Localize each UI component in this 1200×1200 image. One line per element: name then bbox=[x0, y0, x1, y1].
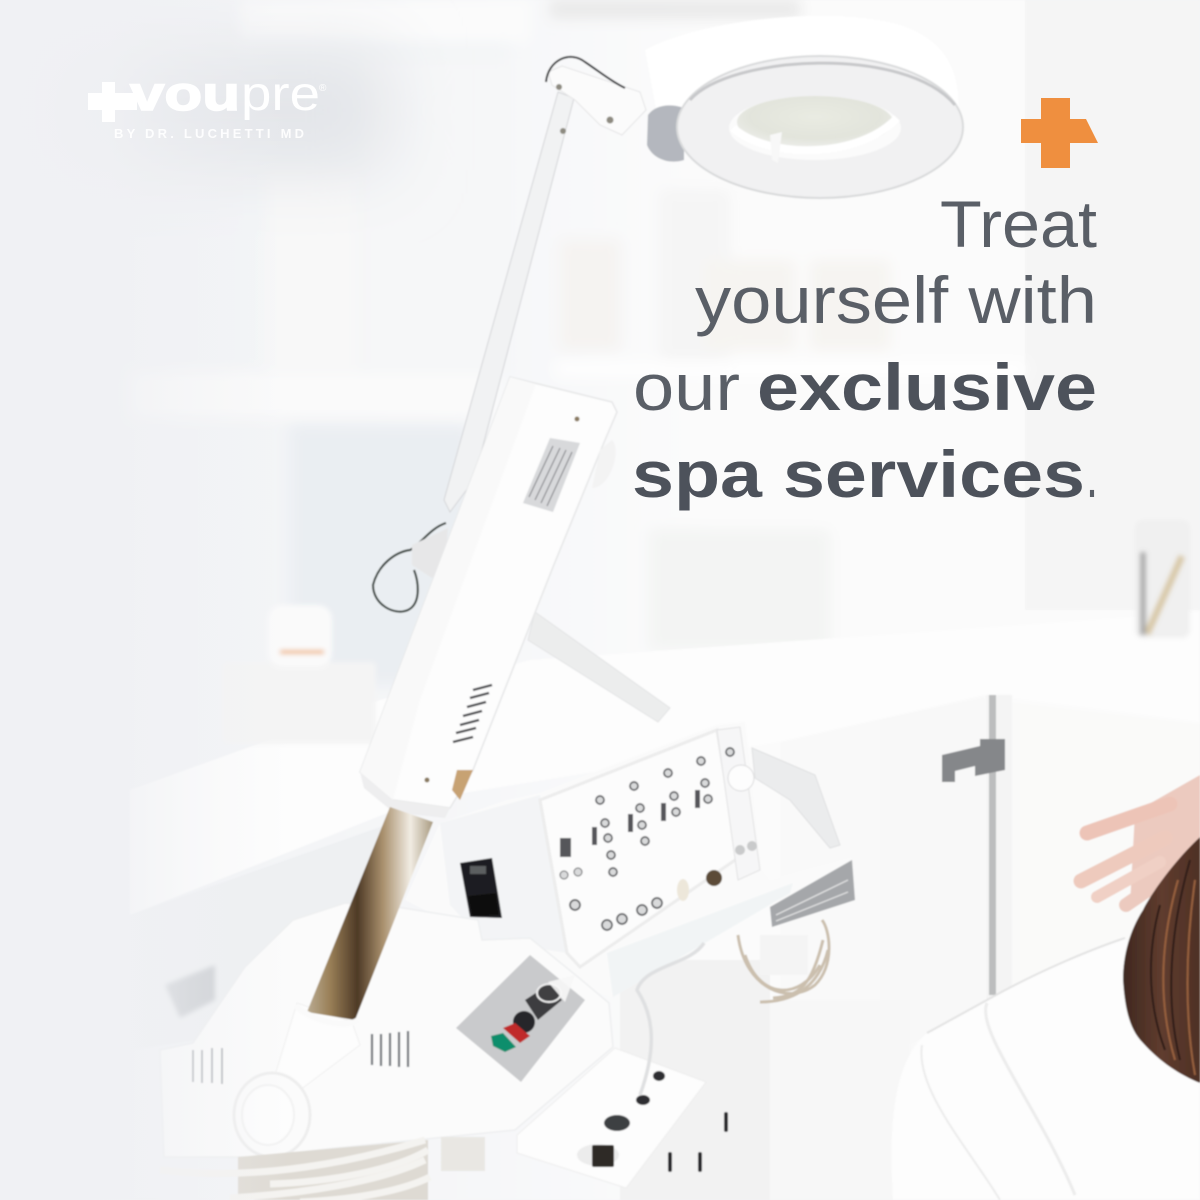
headline: . bbox=[1086, 437, 1098, 511]
headline: our bbox=[633, 350, 740, 424]
lamp cable bbox=[373, 523, 446, 612]
lamp shade bbox=[645, 16, 959, 130]
vents bbox=[372, 1031, 408, 1067]
lens ring bbox=[677, 56, 963, 198]
gold tape bbox=[452, 770, 473, 800]
cable bundle bbox=[238, 1140, 428, 1200]
client hair bbox=[1123, 837, 1200, 1083]
lower cabinets bbox=[780, 695, 985, 1200]
tray bbox=[607, 883, 793, 997]
power socket bbox=[460, 858, 502, 918]
wordmark bbox=[130, 68, 327, 121]
wall panel: right bbox=[1025, 0, 1200, 610]
wordmark: pre bbox=[241, 68, 320, 121]
vent slots bbox=[453, 685, 492, 742]
counter top bbox=[130, 612, 1200, 915]
display bbox=[560, 838, 571, 857]
magnifier lamp bbox=[444, 16, 963, 512]
rotary knob bbox=[525, 985, 562, 1020]
cabinet hinge bbox=[942, 739, 1005, 782]
coiled cable bbox=[738, 920, 829, 1002]
tagline: BY DR. LUCHETTI MD bbox=[114, 126, 304, 141]
headline: exclusive bbox=[757, 350, 1097, 424]
icon: orange cross bbox=[1021, 98, 1098, 168]
wordmark: ® bbox=[319, 83, 327, 94]
chrome pole bbox=[296, 807, 433, 1024]
headline: spa services bbox=[632, 437, 1085, 511]
hand bbox=[1081, 775, 1200, 905]
red button bbox=[503, 1023, 530, 1043]
label sticker bbox=[523, 438, 580, 512]
jar on counter bbox=[222, 605, 376, 744]
shelving: cabinet and shelves bbox=[130, 0, 1026, 685]
headline: yourself with bbox=[695, 263, 1097, 337]
side panel bbox=[717, 727, 760, 880]
knobs bbox=[560, 748, 734, 930]
wordmark: vou bbox=[130, 68, 240, 121]
lamp collar bbox=[647, 105, 684, 162]
bracket bbox=[517, 1048, 706, 1188]
lamp arm bbox=[444, 92, 574, 512]
brush jar: right bbox=[1135, 520, 1190, 638]
post under base bbox=[441, 1137, 485, 1171]
glass tube bbox=[637, 943, 704, 1095]
soft shade behind logo bbox=[60, 50, 390, 170]
arm bracket bbox=[412, 528, 448, 578]
green button bbox=[491, 1033, 516, 1052]
cabinet post bbox=[986, 695, 1012, 1005]
side knob bbox=[592, 440, 616, 488]
icon: plus bbox=[88, 82, 137, 122]
control panel face bbox=[540, 730, 738, 967]
warning plate bbox=[770, 860, 855, 927]
support arm bbox=[752, 748, 840, 848]
long treatment arm housing bbox=[360, 377, 617, 818]
headline: Treat bbox=[940, 187, 1097, 261]
round wheel cap bbox=[234, 1073, 310, 1157]
control unit bbox=[405, 722, 855, 1002]
treatment bed headrest bbox=[892, 938, 1200, 1200]
cabinet holes bbox=[668, 1112, 728, 1172]
steamer arm bbox=[528, 612, 670, 722]
control plate bbox=[456, 955, 585, 1082]
lamp joint bbox=[548, 66, 646, 135]
left hinge bbox=[165, 965, 215, 1018]
logo bbox=[88, 68, 327, 141]
headline bbox=[632, 187, 1098, 511]
base unit bbox=[160, 903, 728, 1200]
